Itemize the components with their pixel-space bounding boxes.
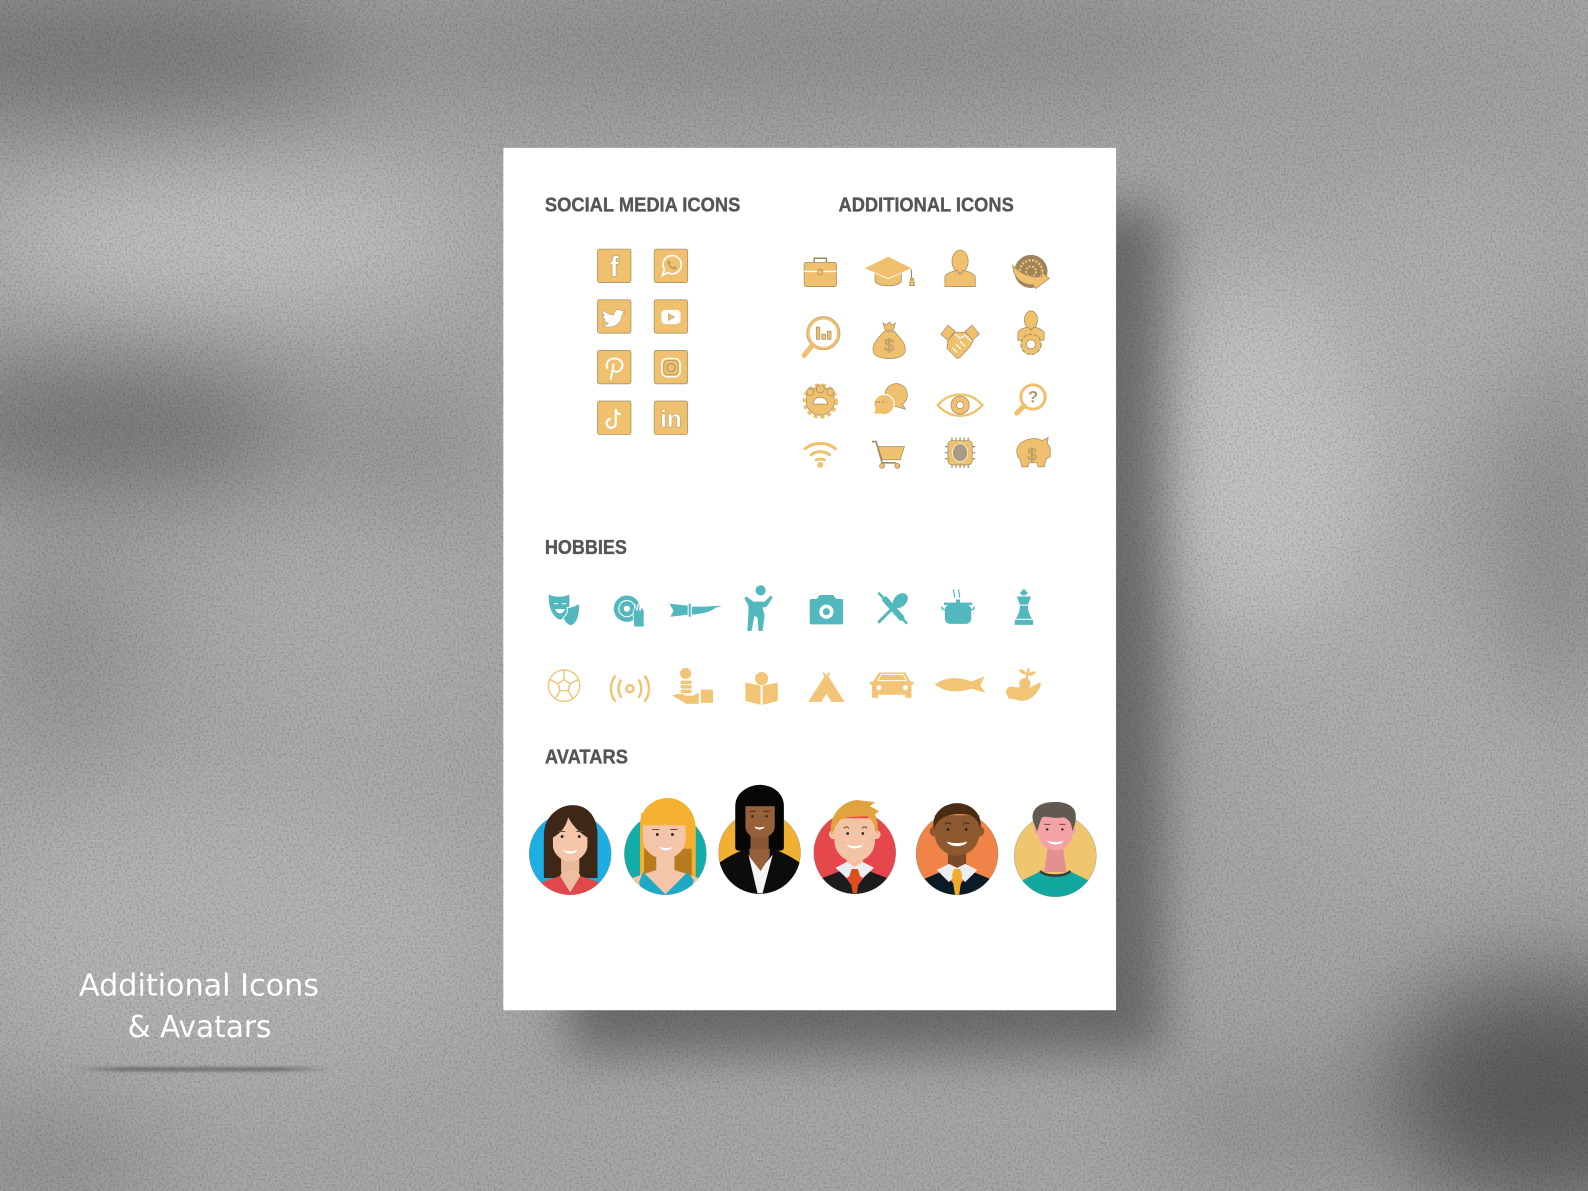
icon: hand holding plant — [1006, 667, 1041, 701]
icon: whisk and rolling pin — [879, 591, 910, 623]
avatar: dark woman yellow background — [719, 785, 801, 895]
icon: pinterest — [598, 350, 631, 384]
heading: social media icons: SOCIAL MEDIA ICONS — [545, 195, 740, 217]
icon: dj turntable hand — [614, 596, 644, 627]
icon: piggy bank: $ — [1027, 446, 1037, 464]
icon: twitter — [598, 300, 631, 333]
hobbies row: gold icons — [548, 667, 1041, 705]
icon: linkedin: in — [660, 406, 682, 433]
icon: eye — [938, 394, 982, 416]
icon: cooking pot — [942, 589, 974, 624]
icon: linkedin — [654, 401, 688, 434]
icon: facebook — [598, 249, 631, 283]
icon: person with gear — [1018, 311, 1044, 354]
icon: magnifier question — [1017, 385, 1045, 413]
icon: graduation cap — [864, 256, 915, 286]
icon: instagram — [654, 350, 688, 384]
avatars — [529, 785, 1096, 902]
heading: hobbies: HOBBIES — [545, 537, 627, 559]
icon: person reading — [745, 672, 778, 705]
icon: camera — [811, 597, 842, 623]
icon: knife — [669, 604, 722, 617]
icon: broadcast — [611, 677, 649, 701]
icon: team gear — [804, 385, 837, 417]
icon: wifi — [805, 443, 836, 468]
icon: money bag: $ — [884, 335, 894, 355]
caption underline — [73, 1067, 330, 1071]
icon: tent — [808, 672, 845, 702]
icon: money bag — [873, 322, 905, 359]
icon: cart — [872, 442, 904, 468]
panel: white sheet — [503, 148, 1116, 1010]
icon: facebook: f — [610, 251, 620, 283]
icon: whatsapp — [654, 249, 688, 283]
icon: brain chip — [945, 438, 975, 468]
icon: tiktok — [598, 401, 631, 434]
icon: car — [870, 672, 914, 698]
additional icons — [804, 250, 1050, 468]
icon: magnifier question: ? — [1028, 389, 1038, 407]
icon: fish — [935, 677, 985, 693]
icon: magnifier chart — [804, 316, 840, 355]
icon: theatre masks — [549, 594, 580, 626]
icon: youtube — [654, 300, 688, 333]
avatar: man grey hair yellow background — [1014, 802, 1096, 898]
icon: piggy bank — [1017, 438, 1050, 467]
avatar: blond man red background — [814, 800, 896, 895]
caption: additional icons & avatars: Additional Icons — [79, 969, 319, 1004]
icon: person — [945, 250, 975, 287]
icon: chess king — [1015, 589, 1033, 625]
social media icons — [598, 249, 688, 434]
icon: football — [548, 670, 580, 701]
icon: hand with coins — [672, 668, 713, 704]
icon: chat bubbles — [873, 384, 907, 415]
avatar: woman brown hair blue background — [529, 805, 611, 898]
icon: briefcase — [804, 258, 837, 287]
icon: globe with arrow — [1013, 255, 1049, 289]
icon: handshake — [941, 325, 979, 359]
avatar: blonde woman teal background — [624, 798, 706, 902]
hobbies row: teal icons — [549, 585, 1033, 631]
heading: avatars: AVATARS — [545, 747, 628, 769]
heading: additional icons: ADDITIONAL ICONS — [839, 195, 1014, 217]
paper shadow — [567, 208, 1165, 1053]
caption: additional icons & avatars: & Avatars — [128, 1010, 271, 1045]
caption: additional icons & avatars — [79, 969, 319, 1045]
avatar: dark man orange background — [916, 803, 998, 896]
icon: dancer — [744, 585, 773, 631]
